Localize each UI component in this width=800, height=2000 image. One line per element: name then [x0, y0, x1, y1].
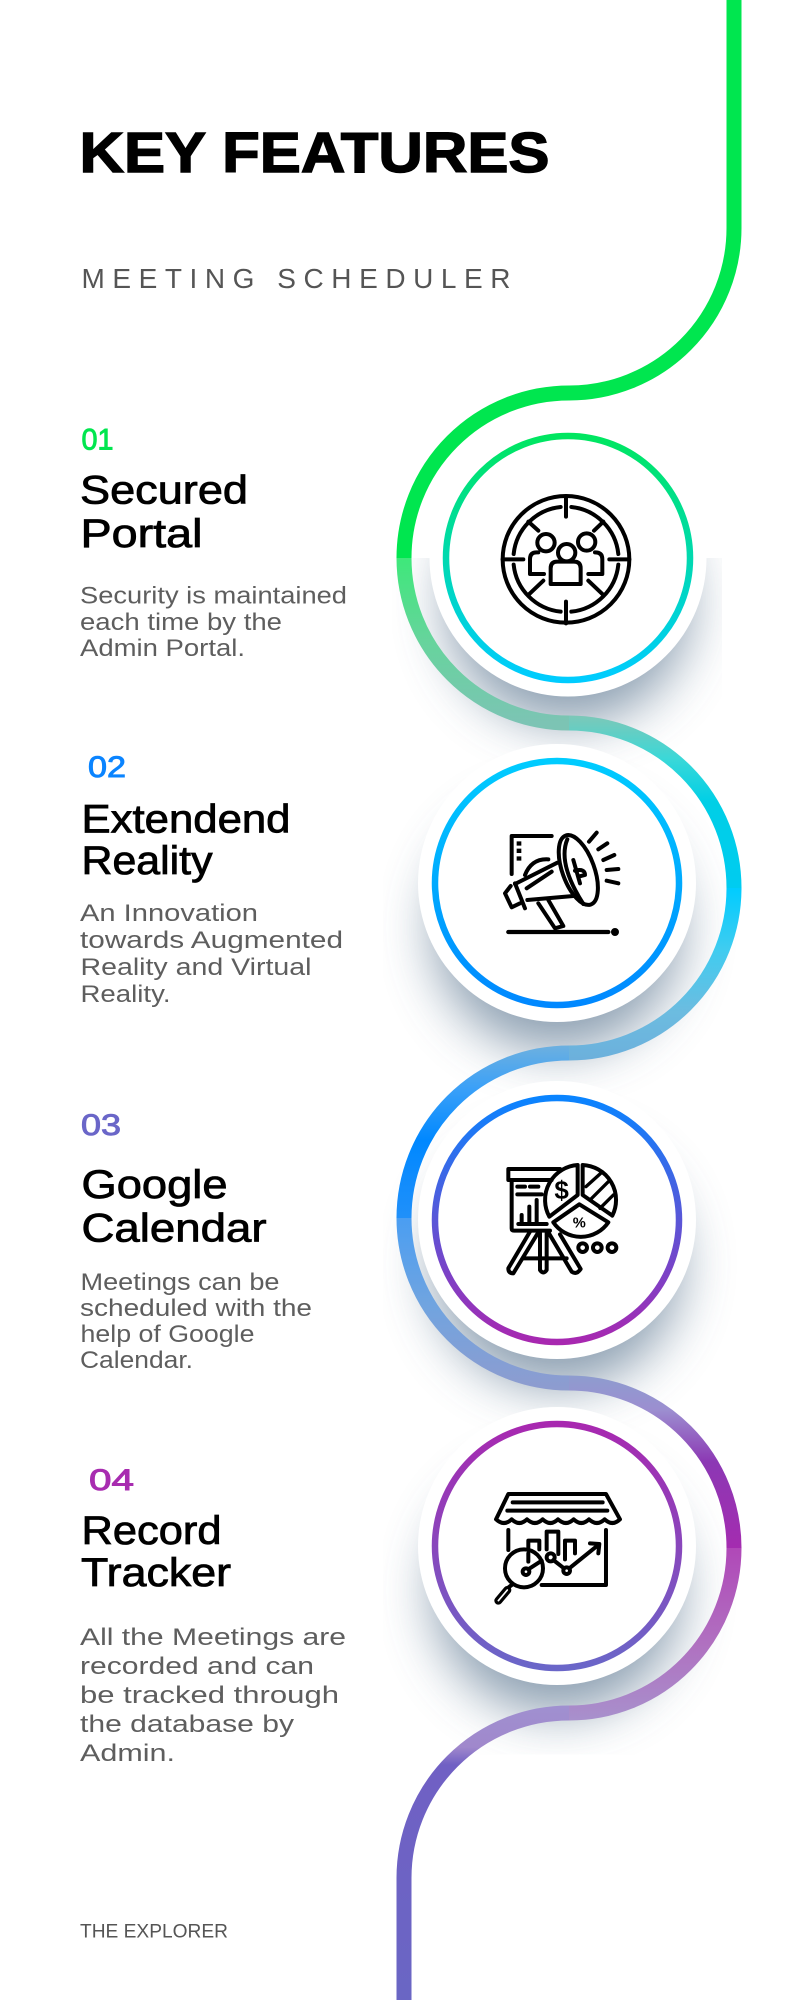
drop shadows behind circles [433, 480, 690, 1714]
description 01: Security is maintained [80, 582, 347, 610]
heading: Extendend Reality [82, 798, 290, 883]
panel: 02 Extendend Reality text [80, 751, 343, 1008]
gradient ring [435, 1424, 679, 1668]
white disc [418, 1081, 696, 1359]
number 04: 04 [89, 1464, 134, 1497]
description 02: towards Augmented [80, 927, 343, 954]
heading: Secured Portal [80, 468, 248, 556]
description 04 [80, 1624, 346, 1767]
panel: 04 Record Tracker text [80, 1464, 346, 1767]
description 02 [80, 900, 343, 1008]
white disc [430, 420, 706, 696]
number 01: 01 [82, 424, 114, 456]
description 01: Admin Portal. [80, 635, 245, 662]
description 02: Reality and Virtual [80, 954, 312, 981]
description 04: All the Meetings are [80, 1624, 346, 1651]
description 03 [80, 1269, 312, 1374]
subtitle: MEETING SCHEDULER [82, 263, 510, 294]
winding gradient path [404, 0, 734, 2000]
white disc [418, 744, 696, 1022]
gradient ring [446, 436, 690, 680]
heading: Google Calendar [82, 1163, 266, 1250]
heading: Google Calendar: Calendar [82, 1206, 266, 1250]
panel: 03 circle [418, 1081, 696, 1359]
panel: 01 Secured Portal text [80, 424, 347, 662]
footer: THE EXPLORER [80, 1922, 228, 1942]
gradient ring [435, 761, 679, 1005]
description 02: Reality. [80, 981, 170, 1008]
description 01: each time by the [80, 609, 282, 636]
heading: Extendend Reality: Extendend [82, 798, 290, 842]
number 03: 03 [81, 1109, 121, 1142]
description 04: the database by [80, 1711, 294, 1738]
panel: 01 circle [430, 420, 706, 696]
description 03: scheduled with the [80, 1295, 312, 1322]
icon: storefront with analytics [496, 1494, 620, 1601]
description 04: recorded and can [80, 1653, 314, 1680]
icon: presentation board and pie chart: % [573, 1216, 586, 1232]
panel: 03 Google Calendar text [80, 1109, 312, 1374]
description 01 [80, 582, 347, 662]
description 04: Admin. [80, 1740, 175, 1767]
icon: megaphone [505, 830, 618, 934]
description 04: be tracked through [80, 1682, 339, 1709]
heading: Record Tracker: Record [82, 1509, 222, 1553]
icon: presentation board and pie chart: $ [554, 1175, 569, 1205]
description 02: An Innovation [80, 900, 258, 927]
icon: presentation board and pie chart [508, 1165, 616, 1273]
title: KEY FEATURES [80, 121, 550, 185]
heading: Secured Portal: Secured [80, 468, 248, 512]
panel: 04 circle [418, 1407, 696, 1685]
gradient ring [435, 1098, 679, 1342]
number 02: 02 [88, 751, 126, 784]
heading: Extendend Reality: Reality [82, 839, 212, 883]
heading: Google Calendar: Google [82, 1163, 228, 1207]
white disc [418, 1407, 696, 1685]
description 03: Calendar. [80, 1347, 193, 1374]
heading: Record Tracker [81, 1509, 231, 1595]
icon: target with people [503, 496, 629, 623]
description 03: Meetings can be [80, 1269, 280, 1296]
panel: 02 circle [418, 744, 696, 1022]
heading: Secured Portal: Portal [80, 512, 202, 556]
description 03: help of Google [80, 1321, 254, 1348]
heading: Record Tracker: Tracker [81, 1551, 231, 1595]
